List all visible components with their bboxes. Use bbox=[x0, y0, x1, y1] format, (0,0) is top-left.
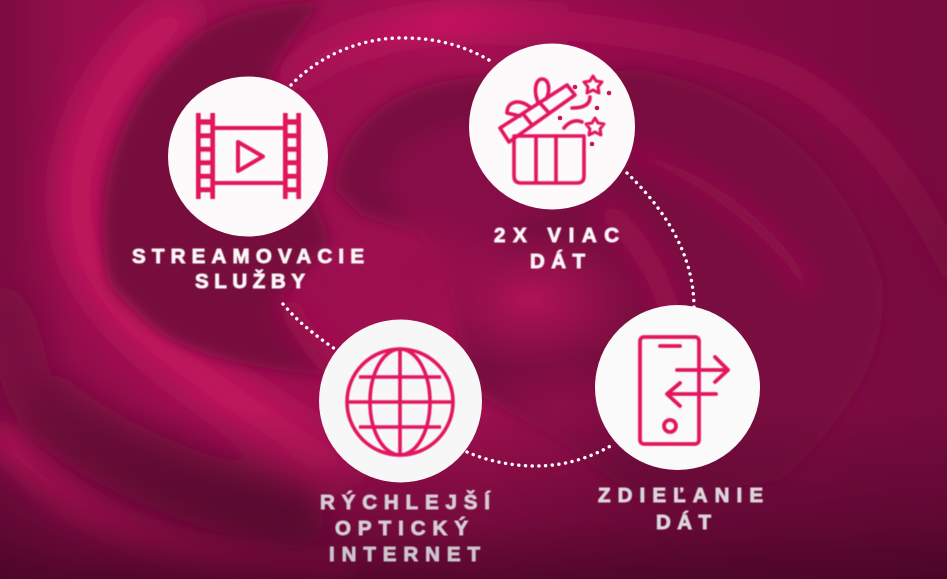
dotted connector: globe to streaming bbox=[283, 304, 335, 349]
icon: globe bbox=[347, 349, 453, 455]
label: faster optical internet bbox=[320, 490, 491, 566]
label: twice the data bbox=[494, 224, 619, 273]
dotted connector: streaming to gift bbox=[291, 38, 494, 85]
node: faster optical internet bbox=[319, 320, 491, 566]
icon: phone with exchange arrows bbox=[640, 337, 728, 444]
dotted connector: phone to globe bbox=[467, 444, 614, 466]
label: twice the data: 2X VIAC bbox=[494, 224, 619, 247]
icon: open gift box bbox=[500, 76, 604, 183]
label: faster optical internet: RÝCHLEJŠÍ bbox=[320, 490, 491, 514]
label: data sharing: ZDIEĽANIE bbox=[598, 484, 763, 507]
node: data sharing bbox=[595, 305, 763, 534]
label: twice the data: DÁT bbox=[530, 250, 585, 273]
icon: confetti dots bbox=[558, 85, 611, 146]
label: streaming services: SLUŽBY bbox=[195, 269, 305, 293]
label: data sharing bbox=[598, 484, 763, 534]
label: faster optical internet: INTERNET bbox=[329, 543, 480, 566]
dotted connector: gift to phone bbox=[627, 173, 694, 308]
label: streaming services: STREAMOVACIE bbox=[132, 245, 364, 268]
icon: film strip with play button bbox=[196, 113, 301, 199]
label: data sharing: DÁT bbox=[656, 511, 711, 534]
label: faster optical internet: OPTICKÝ bbox=[335, 516, 468, 540]
node: twice the data bbox=[469, 44, 635, 273]
label: streaming services bbox=[132, 245, 364, 293]
node: streaming services bbox=[132, 76, 364, 293]
